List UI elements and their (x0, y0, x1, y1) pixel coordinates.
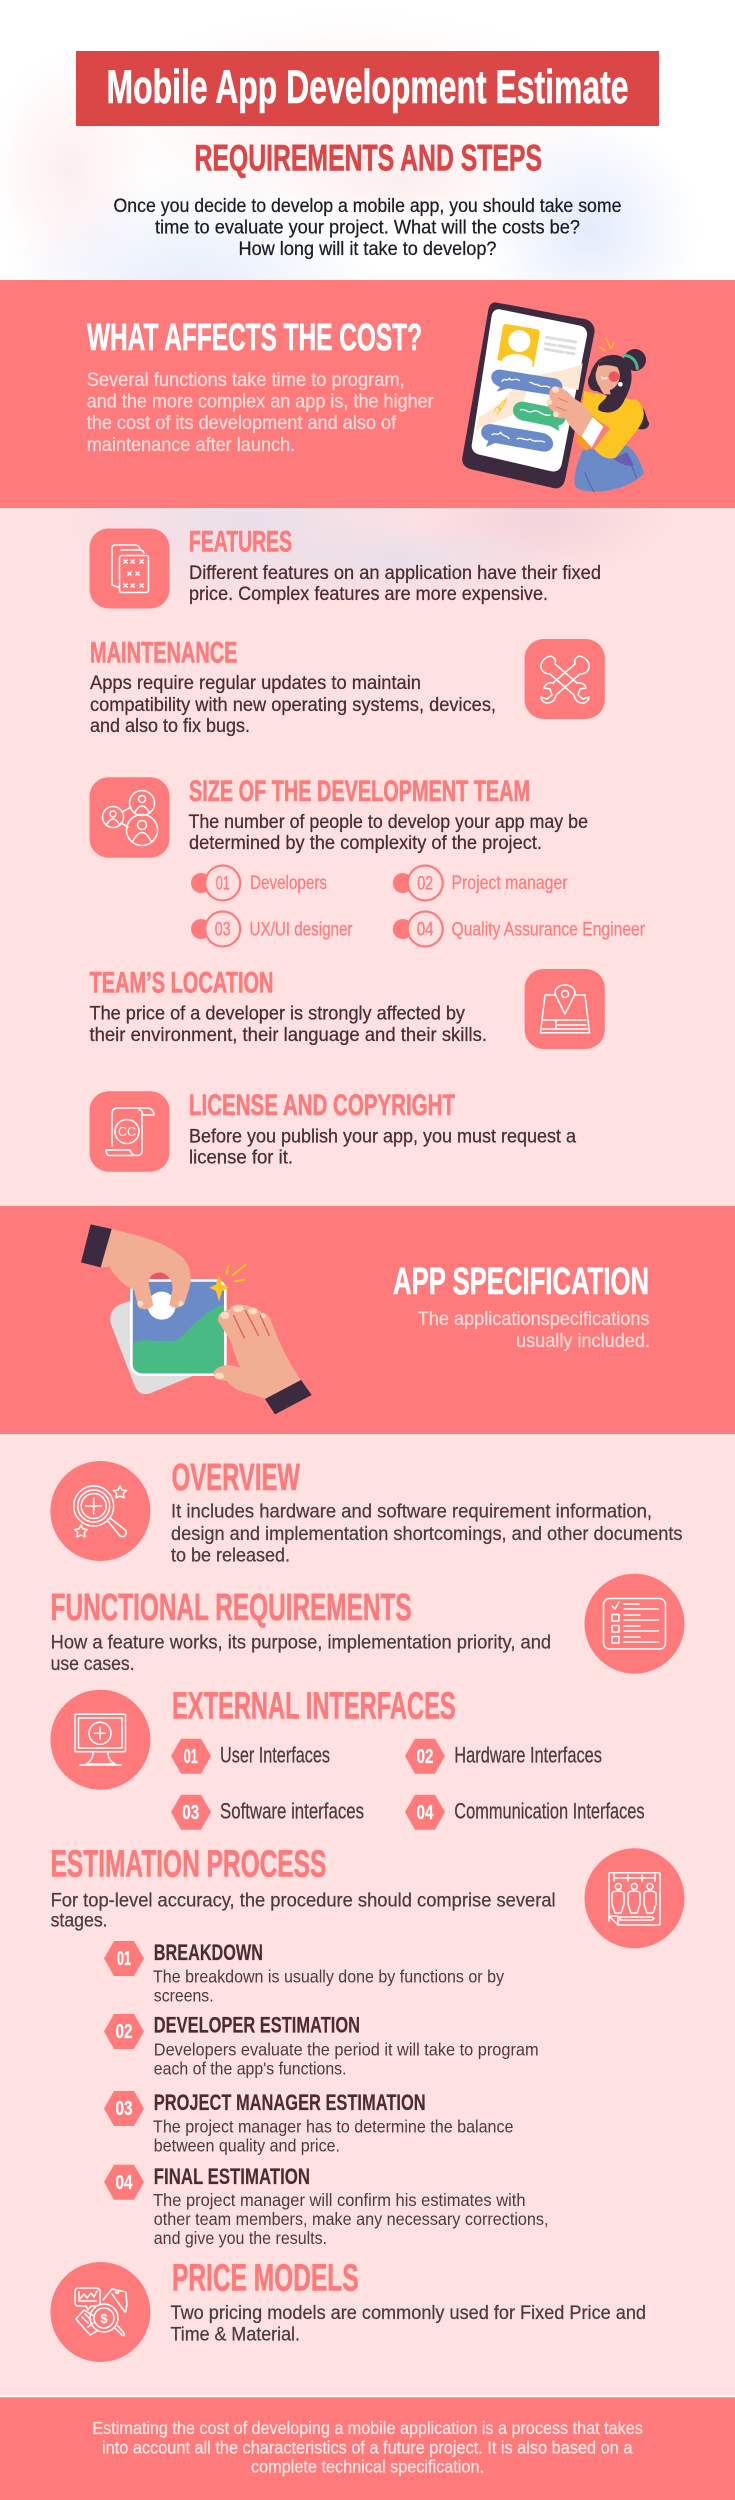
list item 03 (191, 912, 353, 946)
step 04: FINAL ESTIMATION (154, 2164, 310, 2189)
step 03: 03 (116, 2098, 132, 2120)
list item 01: User Interfaces (220, 1743, 330, 1768)
step 02 (104, 2013, 539, 2078)
list item 03: Software interfaces (220, 1799, 364, 1824)
icon: crossed wrenches (525, 639, 605, 719)
panel: features (90, 526, 601, 608)
intro text: time to evaluate your project. What will the costs be? (155, 216, 580, 238)
icon: price analysis: $ (100, 2311, 108, 2326)
panel: functional requirements (51, 1574, 685, 1675)
step 01: screens. (154, 1985, 214, 2005)
list item 02: 02 (417, 872, 433, 894)
text block: The price of a developer is strongly affected by (90, 1003, 465, 1024)
heading: LICENSE AND COPYRIGHT (189, 1089, 455, 1122)
heading: OVERVIEW (172, 1457, 300, 1499)
list item 02: Project manager (452, 873, 568, 894)
list item 04: Quality Assurance Engineer (452, 920, 646, 941)
step 04 (104, 2164, 548, 2248)
list item 04 (393, 912, 646, 946)
text block: usually included. (516, 1330, 650, 1352)
panel: price models (50, 2258, 646, 2362)
footer text: complete technical specification. (251, 2456, 484, 2476)
text block: maintenance after launch. (87, 434, 295, 456)
heading: TEAM’S LOCATION (90, 967, 274, 1000)
text block: Several functions take time to program, (87, 369, 405, 391)
step 01: 01 (117, 1948, 131, 1970)
panel: external interfaces (50, 1686, 645, 1830)
list item 01 (171, 1739, 330, 1774)
intro text: Once you decide to develop a mobile app, you should take some (114, 195, 622, 217)
icon: woman holding phone illustration (462, 302, 649, 492)
heading: PRICE MODELS (172, 2258, 359, 2300)
text block (51, 1890, 556, 1932)
text block: design and implementation shortcomings, and other documents (171, 1523, 683, 1545)
text block: It includes hardware and software requirement information, (171, 1501, 652, 1523)
footer text: Estimating the cost of developing a mobile application is a process that takes (92, 2418, 643, 2438)
list item 01 (191, 866, 327, 900)
panel: size of the development team (90, 775, 646, 946)
icon: cc scroll (90, 1091, 170, 1172)
text block: The applicationspecifications (418, 1308, 650, 1330)
panel: estimation process (51, 1844, 685, 2248)
icon: checklist (584, 1574, 684, 1674)
text block: their environment, their language and their skills. (90, 1025, 487, 1046)
heading: FEATURES (189, 526, 292, 559)
text block: How a feature works, its purpose, implementation priority, and (51, 1631, 551, 1653)
step 04: 04 (116, 2172, 133, 2194)
text block: Two pricing models are commonly used for Fixed Price and (170, 2302, 646, 2324)
step 04: and give you the results. (154, 2228, 327, 2248)
heading: ESTIMATION PROCESS (51, 1844, 326, 1886)
heading: WHAT AFFECTS THE COST? (87, 317, 422, 359)
step 04: The project manager will confirm his estimates with (153, 2190, 526, 2210)
text block: price. Complex features are more expensive. (189, 584, 548, 605)
text block: use cases. (51, 1653, 135, 1675)
text block (51, 1631, 551, 1675)
text block: Apps require regular updates to maintain (90, 673, 421, 694)
text block: the cost of its development and also of (87, 412, 397, 434)
icon: monitor (50, 1690, 150, 1790)
panel: maintenance (90, 637, 605, 737)
text block: stages. (51, 1910, 108, 1932)
list item 02: Hardware Interfaces (454, 1743, 602, 1768)
intro text (114, 195, 622, 260)
text block (170, 2302, 646, 2346)
step 01: The breakdown is usually done by functions or by (153, 1966, 504, 1986)
panel: app specification band (0, 1206, 735, 1434)
list item 04: 04 (416, 1802, 434, 1824)
icon: feature cards (90, 528, 170, 608)
text block (418, 1308, 650, 1352)
heading: EXTERNAL INTERFACES (172, 1686, 456, 1728)
list item 04: Communication Interfaces (454, 1799, 645, 1824)
list item 03 (171, 1795, 364, 1830)
icon: price analysis (50, 2262, 150, 2362)
panel: footer band (0, 2396, 735, 2500)
list item 03: UX/UI designer (250, 920, 353, 941)
list item 03: 03 (182, 1802, 199, 1824)
text block (87, 369, 434, 456)
step 02: DEVELOPER ESTIMATION (154, 2013, 360, 2038)
list item 01: 01 (216, 872, 230, 894)
panel: header background (0, 0, 735, 430)
text block: and also to fix bugs. (90, 716, 250, 737)
icon: magnifier with stars (50, 1461, 150, 1561)
heading: MAINTENANCE (90, 637, 238, 670)
list item 03: 03 (215, 919, 231, 941)
list item 04 (405, 1795, 645, 1830)
text block: compatibility with new operating systems, devices, (90, 695, 496, 716)
text block (189, 1126, 576, 1168)
text block: Different features on an application have their fixed (189, 563, 601, 584)
text block: For top-level accuracy, the procedure should comprise several (51, 1890, 556, 1912)
list item 02 (393, 866, 568, 900)
text block (90, 1003, 487, 1046)
text block (171, 1501, 683, 1567)
footer text (92, 2418, 643, 2476)
step 02: 02 (116, 2021, 132, 2043)
step 03: PROJECT MANAGER ESTIMATION (154, 2090, 426, 2115)
step 03: between quality and price. (154, 2135, 340, 2155)
text block: Time & Material. (170, 2324, 300, 2346)
text block: determined by the complexity of the project. (189, 833, 542, 854)
icon: hands holding picture illustration (81, 1224, 312, 1414)
icon: team network (90, 777, 170, 858)
step 03 (104, 2090, 514, 2155)
step 02: each of the app's functions. (154, 2058, 346, 2078)
list item 01: 01 (184, 1746, 198, 1768)
heading: FUNCTIONAL REQUIREMENTS (51, 1587, 412, 1629)
icon: map pin (525, 969, 605, 1049)
step 04: other team members, make any necessary corrections, (154, 2209, 549, 2229)
subtitle: REQUIREMENTS AND STEPS (194, 138, 542, 179)
list item 01: Developers (250, 873, 327, 894)
panel: cost factors background glow (60, 425, 670, 615)
step 01 (104, 1940, 504, 2005)
title banner (76, 51, 659, 126)
panel: overview (50, 1457, 683, 1567)
panel: license and copyright (90, 1089, 576, 1172)
icon: cc scroll: CC (118, 1125, 136, 1139)
list item 02: 02 (416, 1746, 434, 1768)
heading: SIZE OF THE DEVELOPMENT TEAM (189, 775, 530, 808)
text block: and the more complex an app is, the higher (87, 390, 434, 412)
text block (90, 673, 496, 737)
text block: license for it. (189, 1147, 293, 1168)
text block (189, 563, 601, 605)
text block: Before you publish your app, you must request a (189, 1126, 576, 1147)
step 01: BREAKDOWN (154, 1940, 263, 1965)
step 02: Developers evaluate the period it will take to program (154, 2039, 539, 2059)
list item 02 (405, 1739, 602, 1774)
text block: The number of people to develop your app may be (188, 812, 588, 833)
panel: what affects the cost band (0, 280, 735, 508)
icon: people blueprint (584, 1848, 684, 1948)
footer text: into account all the characteristics of a future project. It is also based on a (102, 2437, 633, 2457)
step 03: The project manager has to determine the balance (153, 2116, 514, 2136)
text block: to be released. (171, 1545, 290, 1567)
list item 04: 04 (417, 919, 434, 941)
intro text: How long will it take to develop? (238, 238, 497, 260)
panel: team's location (90, 967, 605, 1049)
text block (188, 812, 588, 854)
